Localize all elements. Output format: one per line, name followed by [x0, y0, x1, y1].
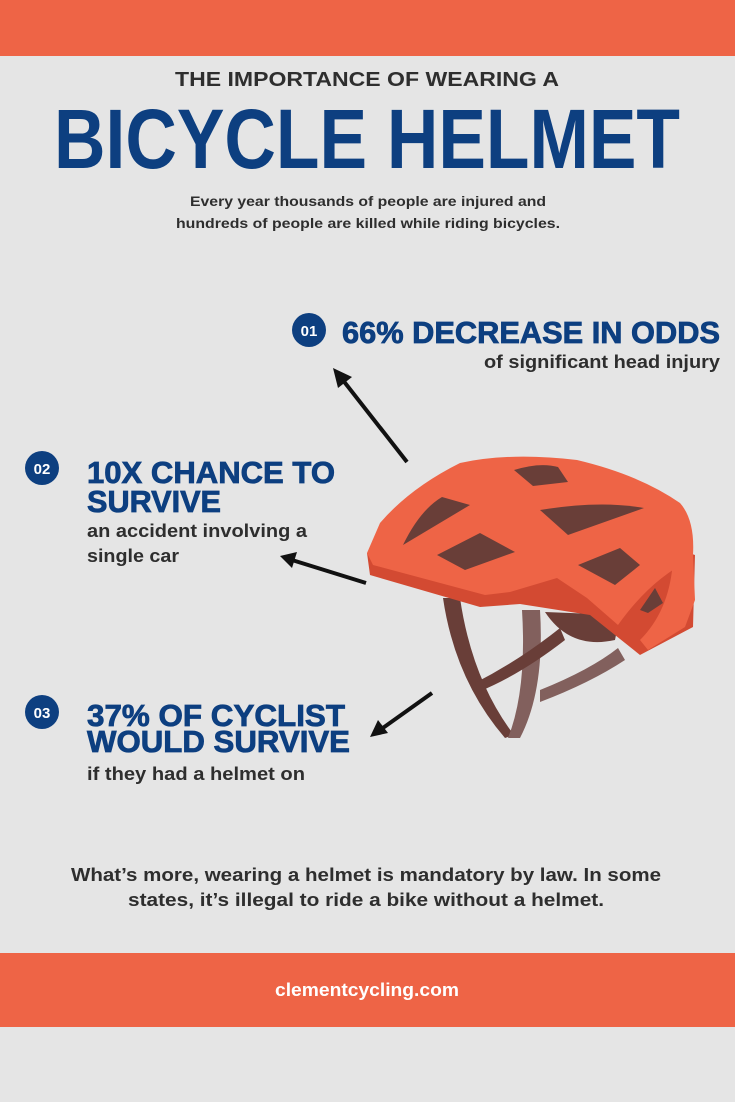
stat 02 — [25, 451, 335, 566]
straps — [443, 598, 514, 738]
stat 03: WOULD SURVIVE — [87, 724, 350, 759]
stat 02: 10X CHANCE TO — [87, 455, 335, 490]
stat 02: single car — [87, 546, 179, 566]
stat 02: SURVIVE — [87, 484, 221, 519]
intro text: Every year thousands of people are injured and — [190, 193, 546, 209]
intro text — [176, 193, 560, 231]
intro text: hundreds of people are killed while riding bicycles. — [176, 215, 560, 231]
stat 02: an accident involving a — [87, 521, 308, 541]
rear piece — [640, 555, 695, 650]
stat 01: 01 — [301, 323, 317, 340]
subtitle heading: THE IMPORTANCE OF WEARING A — [175, 69, 559, 91]
stat 03: 37% OF CYCLIST — [87, 698, 345, 733]
footer url: clementcycling.com — [275, 980, 459, 1000]
footer bar — [0, 953, 735, 1027]
closing text — [71, 865, 661, 910]
arrows — [280, 368, 432, 737]
stat 01: of significant head injury — [484, 352, 720, 372]
stat 01: 66% DECREASE IN ODDS — [342, 315, 720, 350]
stat 02: 02 — [34, 461, 50, 478]
vents — [403, 465, 663, 613]
top bar — [0, 0, 735, 56]
stat 01 — [292, 313, 720, 372]
closing text: What’s more, wearing a helmet is mandatory by law. In some — [71, 865, 661, 885]
stat 03: if they had a helmet on — [87, 764, 305, 784]
lower shell band — [367, 550, 695, 655]
helmet illustration — [367, 457, 695, 738]
closing text: states, it’s illegal to ride a bike without a helmet. — [128, 890, 604, 910]
main shell — [367, 457, 693, 625]
stat 03 — [25, 695, 350, 784]
stat 03: 03 — [34, 705, 50, 722]
